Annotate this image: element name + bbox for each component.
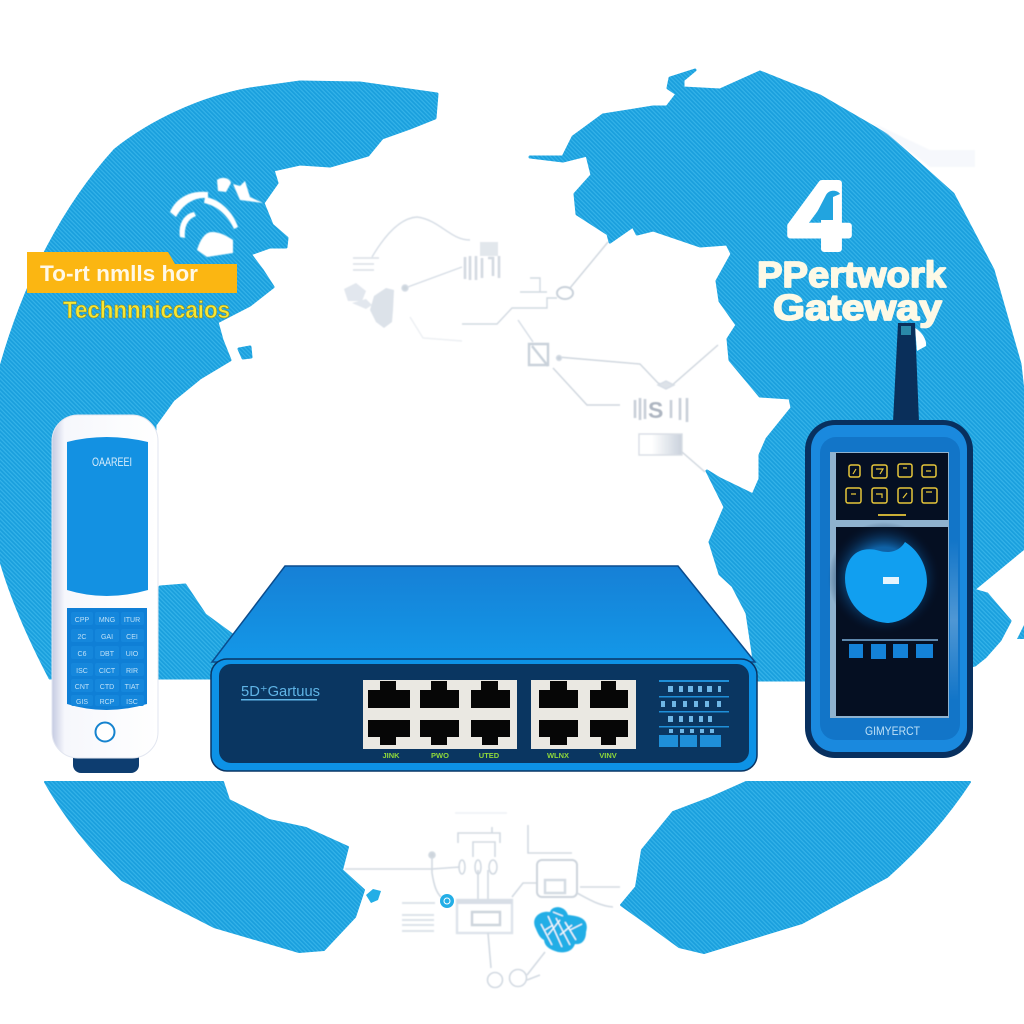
heading: Network Gateway: PPertwork xyxy=(757,254,947,295)
network diagram: upper centre: S xyxy=(648,397,663,423)
handset screen: OAAREEI xyxy=(92,455,132,469)
switch top panel xyxy=(212,566,755,662)
handset keypad: UIO xyxy=(126,651,139,658)
device: handheld gateway xyxy=(805,323,973,758)
gateway screen xyxy=(830,452,949,718)
faint cloud patch xyxy=(873,123,975,167)
handset keypad: CICT xyxy=(99,668,116,675)
gateway app icons xyxy=(846,464,937,515)
port labels: PWO xyxy=(431,751,449,760)
handset keypad: RCP xyxy=(100,699,115,706)
handset keypad: 2C xyxy=(78,634,86,641)
icon: white wireless signal on map xyxy=(170,178,263,257)
icon: small blue node xyxy=(440,894,454,908)
gateway antenna xyxy=(893,323,926,422)
world map: lower left continent xyxy=(45,782,364,952)
handset keypad: MNG xyxy=(99,617,115,624)
gateway globe display xyxy=(828,522,940,634)
gateway body xyxy=(805,420,973,758)
subtitle: technicians: Technnniccaios xyxy=(63,297,230,324)
gateway control buttons xyxy=(842,639,938,659)
handset keypad: CNT xyxy=(75,684,90,691)
network diagram: lower centre xyxy=(345,813,620,988)
handset keypad: GAI xyxy=(101,634,113,641)
handset keypad: CPP xyxy=(75,617,90,624)
port labels xyxy=(382,751,617,760)
icon: small blue island marker xyxy=(366,889,381,903)
port labels: JINK xyxy=(382,751,400,760)
heading: number 4: 4 xyxy=(789,163,849,270)
ethernet ports: left block xyxy=(363,680,517,749)
yellow banner with title xyxy=(27,252,237,293)
world map: upper right continent xyxy=(530,70,1024,680)
handset keypad: DBT xyxy=(100,651,115,658)
handset keypad: ISC xyxy=(126,699,138,706)
handset keypad: C6 xyxy=(78,651,87,658)
status led grid xyxy=(659,680,729,747)
gateway label: GIMYERCT xyxy=(865,724,921,738)
handset keypad: GIS xyxy=(76,699,88,706)
switch front panel xyxy=(211,659,757,771)
handset keypad: ISC xyxy=(76,668,88,675)
port labels: UTED xyxy=(479,751,500,760)
handset keypad: TIAT xyxy=(125,684,140,691)
port labels: VINV xyxy=(599,751,617,760)
yellow banner with title: To-rt nmlls hor xyxy=(40,261,198,286)
heading: Network Gateway: Gateway xyxy=(773,287,942,328)
handset keypad: ITUR xyxy=(124,617,140,624)
handset keypad: CTD xyxy=(100,684,114,691)
device: handset on left xyxy=(52,415,158,773)
switch brand label: 5D⁺Gartuus xyxy=(241,683,320,700)
port labels: WLNX xyxy=(547,751,569,760)
world map: lower right continent xyxy=(621,782,970,953)
icon: blue cloud cluster xyxy=(534,907,587,952)
handset keypad: RIR xyxy=(126,668,138,675)
handset screen xyxy=(67,437,148,596)
handset keypad: CEI xyxy=(126,634,138,641)
world map: small eastern island xyxy=(1017,625,1024,639)
handset round button xyxy=(96,722,114,742)
ethernet ports: right block xyxy=(531,680,636,749)
device: network switch xyxy=(211,566,757,771)
world map: upper left continent xyxy=(0,82,437,678)
network diagram: upper centre xyxy=(344,217,718,472)
handset keypad xyxy=(67,608,147,710)
heading: Network Gateway xyxy=(757,254,947,328)
